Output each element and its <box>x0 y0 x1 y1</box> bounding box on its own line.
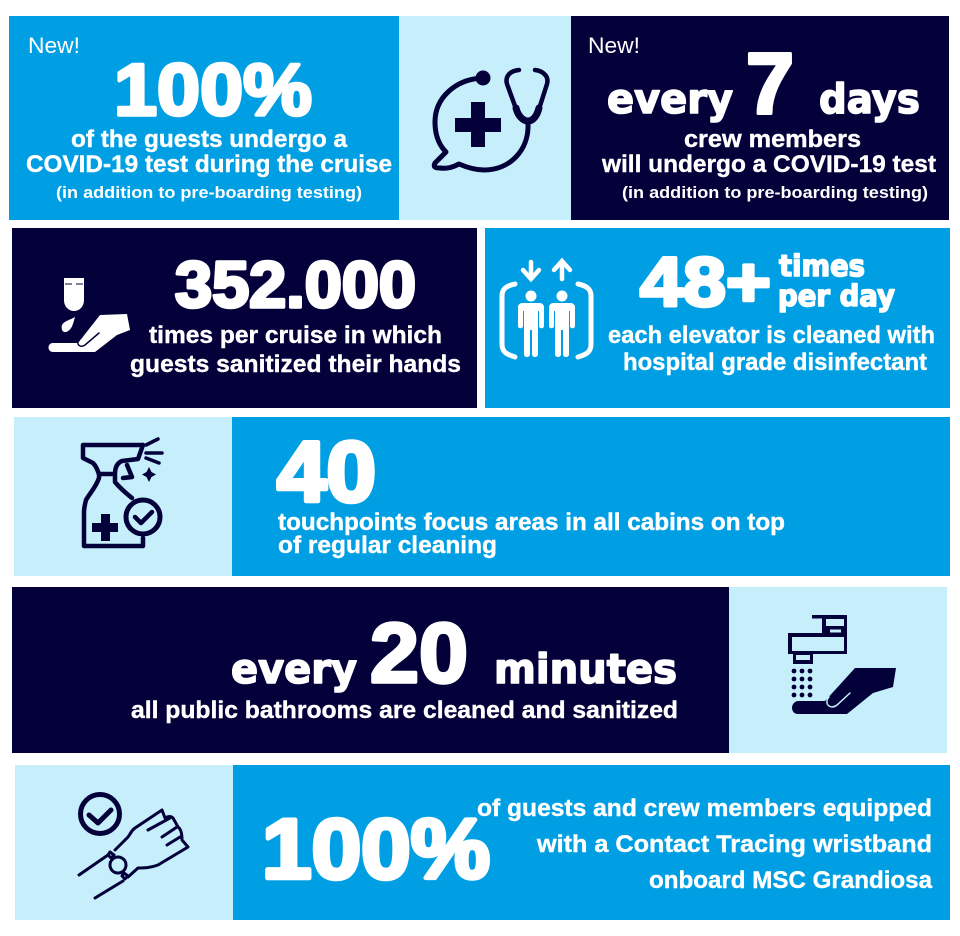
text: guests test line 1: of the guests undergo a <box>71 126 348 153</box>
big number: 7: 7 <box>746 36 794 132</box>
big number: 48+: 48+ <box>640 243 771 321</box>
panel: crew testing <box>571 16 949 220</box>
text: crew line 2: will undergo a COVID-19 test <box>601 151 936 178</box>
text: hands line 2: guests sanitized their hands <box>130 351 461 378</box>
text: guests test note: (in addition to pre-boarding testing) <box>56 183 362 202</box>
icon: elevator with two people <box>502 261 591 357</box>
text: guests test line 2: COVID-19 test during the cruise <box>26 151 392 178</box>
icon: stethoscope speech bubble <box>434 70 547 170</box>
text: new label: New! <box>28 33 80 58</box>
big number: 100%: 100% <box>114 50 312 131</box>
big text: per day: per day <box>778 279 895 313</box>
text: touchpoints line 1: touchpoints focus areas in all cabins on top <box>278 509 785 536</box>
text: new label: New! <box>588 33 640 58</box>
big text: times: times <box>779 249 865 283</box>
big number: 100%: 100% <box>262 802 490 896</box>
big text: minutes: minutes <box>494 645 677 693</box>
text: wristband line 1: of guests and crew members equipped <box>477 795 932 822</box>
text: crew note: (in addition to pre-boarding testing) <box>622 183 928 202</box>
panel: wristband icon <box>15 765 233 920</box>
icon: sanitizer drop on hand <box>48 278 130 352</box>
icon: tap and washing hand <box>788 615 896 714</box>
text: hands line 1: times per cruise in which <box>149 322 442 349</box>
big text: days: days <box>819 75 920 123</box>
text: wristband line 3: onboard MSC Grandiosa <box>649 867 933 894</box>
text: elevator line 1: each elevator is cleaned with <box>608 322 935 349</box>
big number: 20: 20 <box>370 606 468 700</box>
panel: contact tracing wristband <box>233 765 950 920</box>
text: touchpoints line 2: of regular cleaning <box>278 532 497 559</box>
panel: guest testing <box>9 16 399 220</box>
panel: hand sanitizing <box>12 228 477 408</box>
big text: every: every <box>607 75 733 123</box>
panel: bathroom icon <box>729 587 947 753</box>
big number: 40: 40 <box>277 425 376 520</box>
text: elevator line 2: hospital grade disinfectant <box>623 349 927 376</box>
big text: every: every <box>231 645 357 693</box>
panel: elevator cleaning <box>485 228 950 408</box>
panel: touchpoints <box>232 417 950 576</box>
text: crew line 1: crew members <box>684 126 861 153</box>
icon: wristband with check <box>79 794 188 898</box>
big number: 352.000: 352.000 <box>175 248 416 321</box>
icon: spray bottle <box>83 439 162 546</box>
panel: cabin icon <box>14 417 232 576</box>
text: wristband line 2: with a Contact Tracing wristband <box>536 831 932 858</box>
panel: bathrooms <box>12 587 729 753</box>
panel: stethoscope icon <box>399 16 571 220</box>
text: bathrooms line: all public bathrooms are cleaned and sanitized <box>131 697 678 724</box>
